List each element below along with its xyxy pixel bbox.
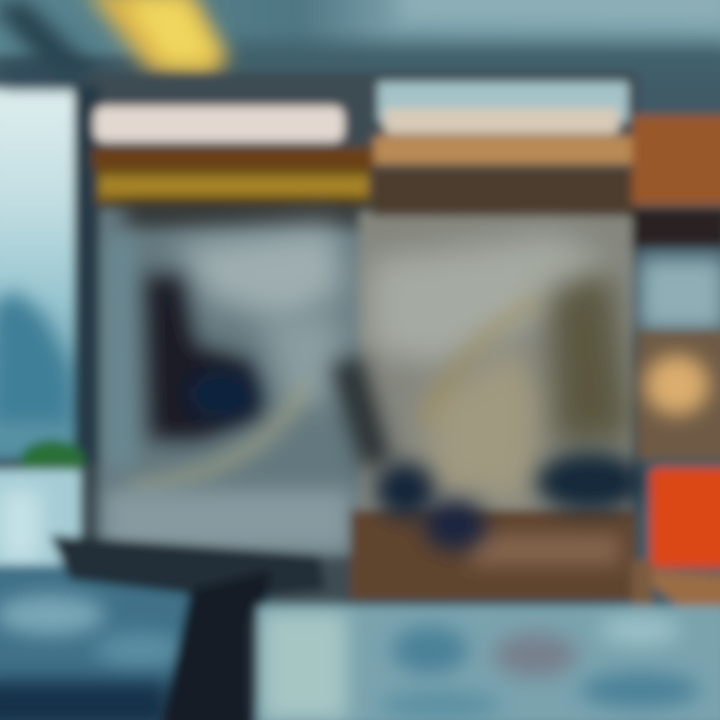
mountains through window	[0, 290, 72, 425]
blurred subtitle	[96, 169, 370, 205]
brown band	[92, 147, 374, 169]
warm lamp area	[638, 330, 720, 460]
blurred title	[94, 106, 344, 142]
dark blue blob left	[375, 462, 435, 518]
wood floor	[350, 510, 635, 600]
floor: lower left water	[0, 470, 270, 720]
poster lower band	[105, 490, 350, 550]
poster header sky	[378, 82, 628, 122]
dark blue blob right	[536, 452, 644, 512]
dark brown band	[372, 168, 634, 216]
poster image light area	[370, 235, 615, 365]
right side room	[632, 115, 720, 650]
window frame	[74, 85, 100, 465]
lamp glow	[645, 355, 709, 415]
tan band	[374, 136, 636, 164]
floor: bottom tiles	[258, 606, 720, 720]
back wall	[78, 72, 638, 602]
beige figure	[425, 345, 545, 500]
tan floor	[635, 570, 720, 650]
red-orange chair	[650, 468, 720, 568]
poster image light patches	[175, 225, 345, 325]
ceiling light	[85, 0, 228, 78]
plant	[20, 440, 84, 480]
dark strip under header	[125, 204, 365, 226]
poster image dark figure	[145, 275, 262, 440]
orange wall	[632, 115, 720, 205]
olive figure	[550, 270, 632, 445]
panel: right poster	[330, 82, 644, 600]
panel: left poster	[92, 106, 374, 555]
diagonal dark divider	[330, 355, 392, 470]
dark blue blob lower	[423, 499, 487, 551]
gold arc	[425, 300, 540, 420]
sky	[640, 258, 720, 330]
dark beam	[632, 208, 720, 248]
ceiling	[0, 0, 720, 100]
window on left	[0, 62, 100, 465]
blurred heading	[384, 108, 619, 134]
poster curve	[130, 385, 305, 488]
table: dark surface	[50, 535, 325, 720]
